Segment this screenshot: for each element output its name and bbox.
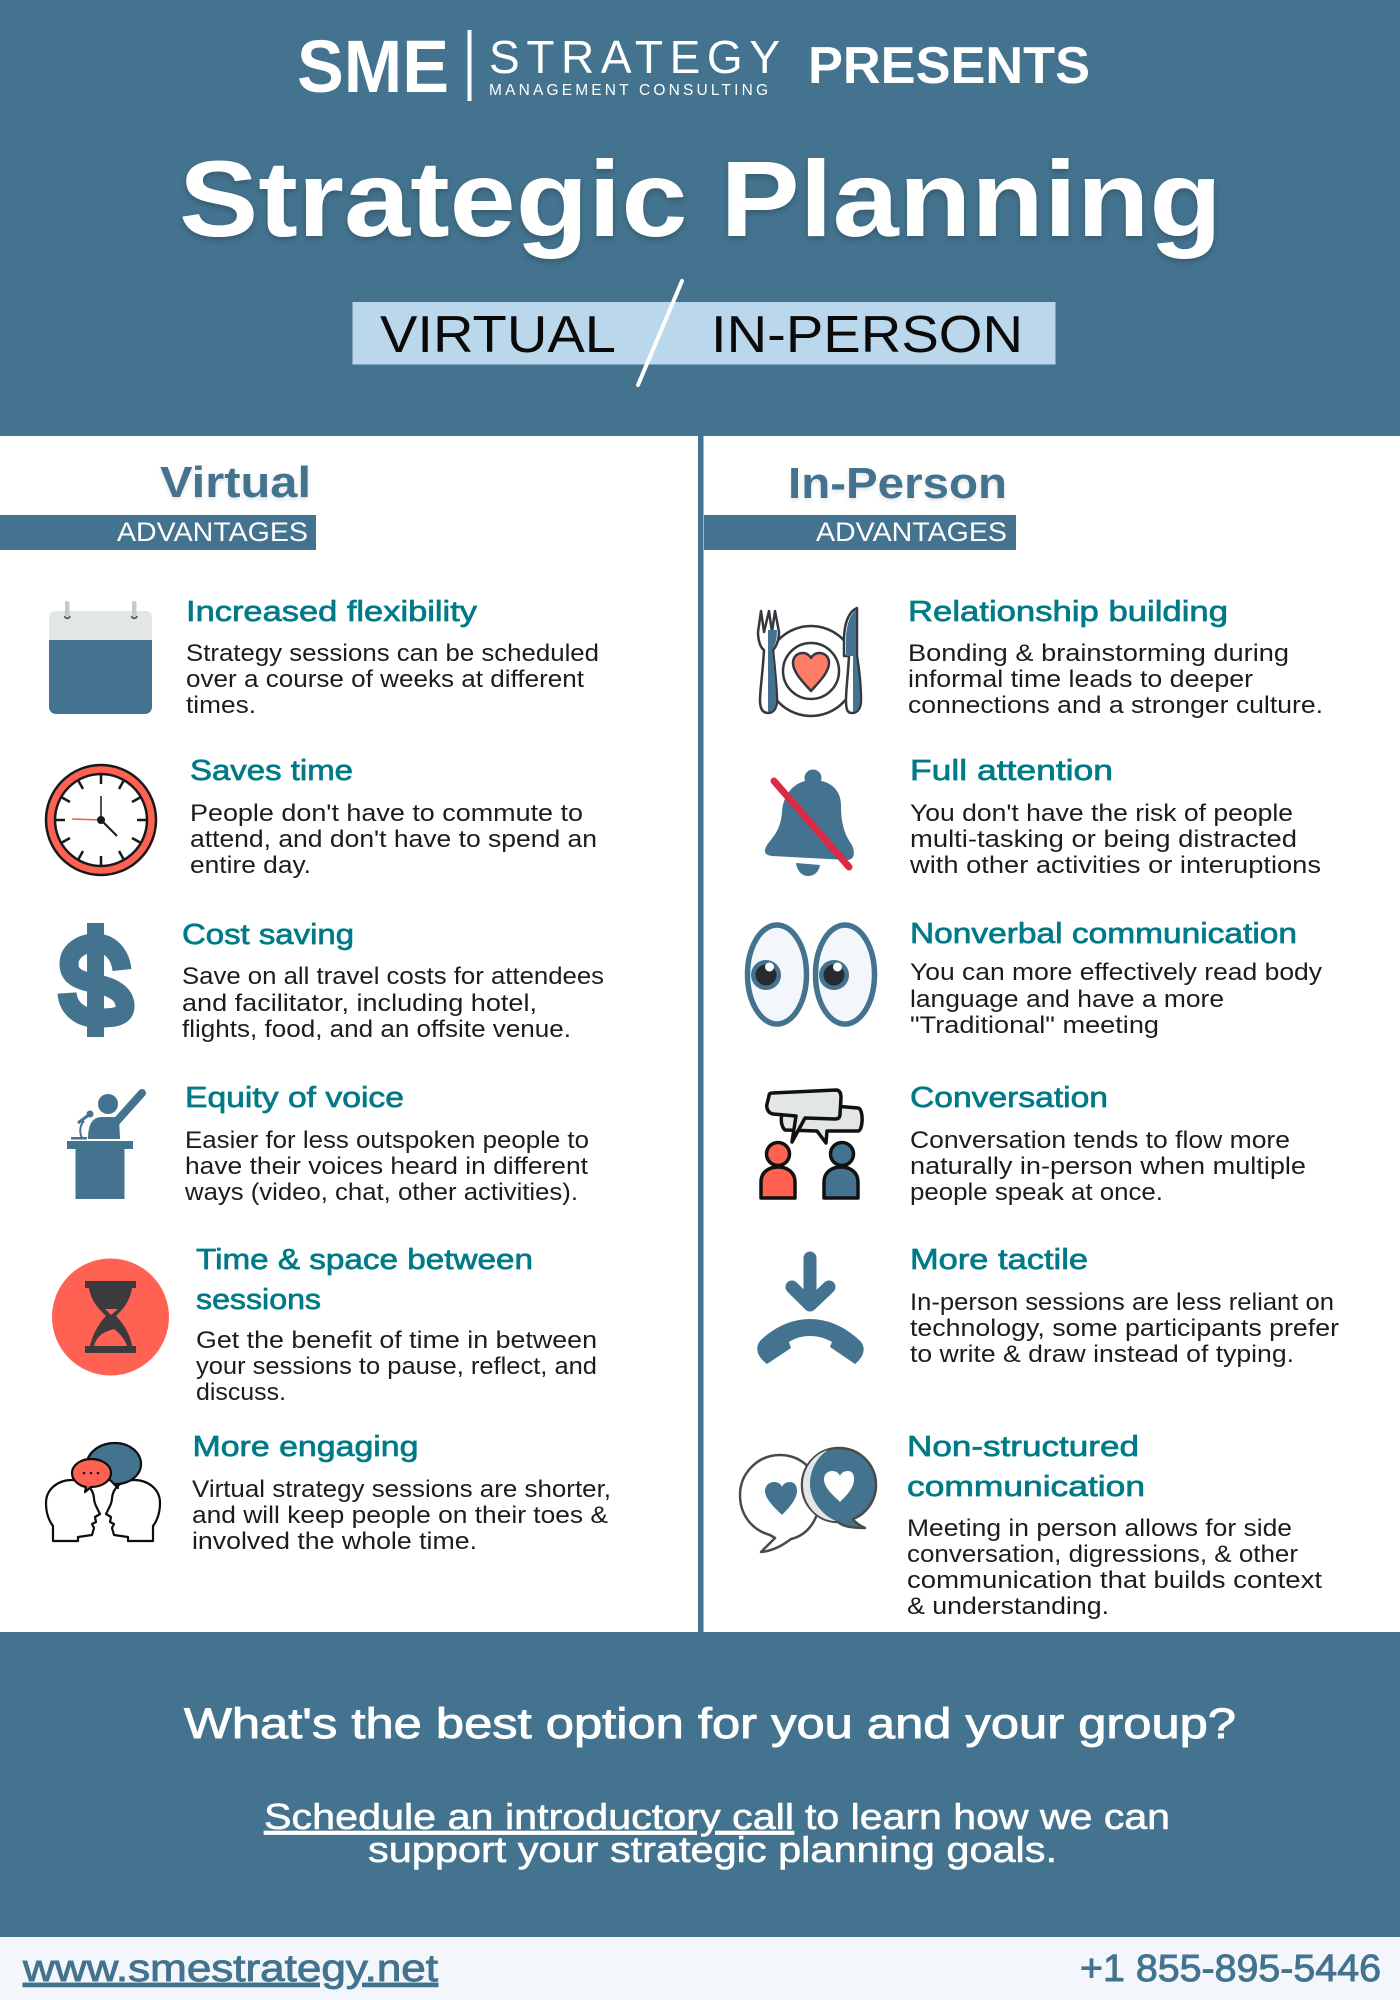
heading: Nonverbal communication [910, 918, 1297, 950]
heading: Full attention [910, 755, 1113, 787]
icon: arrow down to handset [757, 1258, 864, 1364]
body text: "Traditional" meeting [910, 1012, 1159, 1039]
subtitle band: virtual / in-person: IN-PERSON [711, 306, 1023, 364]
body text: over a course of weeks at different [186, 666, 584, 693]
footer call to action [0, 1632, 1400, 1937]
item: non-structured communication [740, 1431, 1322, 1620]
body text: language and have a more [910, 986, 1224, 1013]
item: relationship building [758, 596, 1323, 719]
advantages bar: in-person [704, 515, 1016, 550]
body text: Meeting in person allows for side [907, 1515, 1292, 1542]
subtitle band: virtual / in-person [352, 281, 1056, 385]
item: conversation [761, 1082, 1306, 1206]
item: equity of voice [67, 1082, 589, 1206]
panel: in-person advantages [704, 436, 1400, 1632]
body text: multi-tasking or being distracted [910, 826, 1297, 853]
body text: & understanding. [907, 1593, 1109, 1620]
item: saves time [46, 755, 597, 879]
heading: Increased flexibility [186, 596, 478, 628]
body text [196, 1327, 597, 1406]
heading: More tactile [910, 1244, 1088, 1276]
item: full attention [765, 755, 1321, 879]
item: nonverbal communication [748, 918, 1323, 1039]
body text: entire day. [190, 852, 311, 879]
advantages bar: in-person: ADVANTAGES [816, 517, 1007, 547]
presents label: PRESENTS [808, 37, 1090, 95]
body text: involved the whole time. [192, 1528, 477, 1555]
heading: virtual: Virtual [160, 458, 311, 507]
body text: discuss. [196, 1379, 286, 1406]
item: time and space between sessions [52, 1244, 597, 1406]
body text: Conversation tends to flow more [910, 1127, 1290, 1154]
body text: to write & draw instead of typing. [910, 1341, 1294, 1368]
heading [196, 1244, 533, 1316]
heading: Equity of voice [185, 1082, 404, 1114]
body text: Save on all travel costs for attendees [182, 963, 604, 990]
icon: speech bubbles with hearts [740, 1448, 876, 1552]
body text: In-person sessions are less reliant on [910, 1289, 1334, 1316]
advantages bar: virtual [0, 515, 316, 550]
icon: two heads talking [46, 1443, 160, 1541]
call to action text [264, 1796, 1170, 1870]
body text [184, 1127, 589, 1206]
question heading: What's the best option for you and your group? [184, 1700, 1236, 1748]
logo: SME Strategy [297, 25, 780, 108]
icon: plate, fork and knife [758, 608, 861, 716]
body text [909, 800, 1321, 879]
phone number: +1 855-895-5446 [1080, 1948, 1381, 1990]
body text: technology, some participants prefer [910, 1315, 1339, 1342]
body text: with other activities or interuptions [909, 852, 1321, 879]
body text: people speak at once. [910, 1179, 1163, 1206]
body text: Virtual strategy sessions are shorter, [192, 1476, 611, 1503]
panel: virtual advantages [0, 436, 698, 1632]
body text: People don't have to commute to [190, 800, 583, 827]
heading: More engaging [192, 1431, 418, 1463]
body text: flights, food, and an offsite venue. [182, 1016, 571, 1043]
column divider [698, 436, 704, 1632]
body text: and facilitator, including hotel, [182, 990, 537, 1017]
heading: sessions [196, 1284, 321, 1316]
icon: calendar [49, 601, 152, 714]
body text: connections and a stronger culture. [908, 692, 1323, 719]
body text [192, 1476, 611, 1555]
item: more engaging [46, 1431, 611, 1555]
heading [907, 1431, 1145, 1503]
logo: SME Strategy: SME [297, 25, 449, 108]
body text [190, 800, 597, 879]
body text: conversation, digressions, & other [907, 1541, 1298, 1568]
call to action text: to learn how we can [805, 1796, 1170, 1837]
body text [910, 1127, 1306, 1206]
body text [186, 640, 599, 719]
website: www.smestrategy.net [22, 1948, 439, 1990]
body text: and will keep people on their toes & [192, 1502, 608, 1529]
body text: Bonding & brainstorming during [908, 640, 1289, 667]
icon: dollar sign [67, 923, 125, 1037]
header banner [0, 0, 1400, 436]
body text: informal time leads to deeper [908, 666, 1253, 693]
title: Strategic Planning [179, 138, 1222, 259]
body text: naturally in-person when multiple [910, 1153, 1306, 1180]
call to action text: support your strategic planning goals. [368, 1829, 1057, 1870]
body text: your sessions to pause, reflect, and [196, 1353, 597, 1380]
body text: You don't have the risk of people [910, 800, 1293, 827]
body text: You can more effectively read body [910, 959, 1323, 986]
body text [908, 640, 1323, 719]
heading: Time & space between [196, 1244, 533, 1276]
body text: have their voices heard in different [185, 1153, 588, 1180]
logo: SME Strategy: MANAGEMENT CONSULTING [489, 82, 768, 99]
subtitle band: virtual / in-person: VIRTUAL [380, 306, 616, 364]
body text: times. [186, 692, 256, 719]
icon: two people talking [761, 1090, 862, 1198]
heading: communication [907, 1471, 1145, 1503]
heading: Relationship building [908, 596, 1228, 628]
icon: speaker at podium [67, 1093, 142, 1199]
icon: muted bell [765, 770, 854, 876]
body text: Easier for less outspoken people to [185, 1127, 589, 1154]
icon: clock [46, 765, 156, 875]
body text: communication that builds context [907, 1567, 1322, 1594]
icon: hourglass [52, 1258, 169, 1376]
item: increased flexibility [49, 596, 599, 719]
heading: Non-structured [907, 1431, 1139, 1463]
logo: SME Strategy: STRATEGY [489, 31, 780, 83]
item: cost saving [67, 919, 604, 1043]
body text: Strategy sessions can be scheduled [186, 640, 599, 667]
advantages bar: virtual: ADVANTAGES [117, 517, 308, 547]
call to action text: Schedule an introductory call [264, 1796, 794, 1837]
heading: Saves time [190, 755, 353, 787]
contact bar [0, 1937, 1400, 2000]
body text: Get the benefit of time in between [196, 1327, 597, 1354]
heading: Conversation [910, 1082, 1108, 1114]
heading: Cost saving [182, 919, 354, 951]
body text [910, 1289, 1339, 1368]
body text: ways (video, chat, other activities). [184, 1179, 578, 1206]
icon: eyes [748, 925, 874, 1024]
body text [907, 1515, 1322, 1620]
heading: in-person: In-Person [788, 459, 1007, 508]
body text: attend, and don't have to spend an [190, 826, 597, 853]
body text [182, 963, 604, 1043]
item: more tactile [757, 1244, 1339, 1368]
body text [910, 959, 1323, 1039]
